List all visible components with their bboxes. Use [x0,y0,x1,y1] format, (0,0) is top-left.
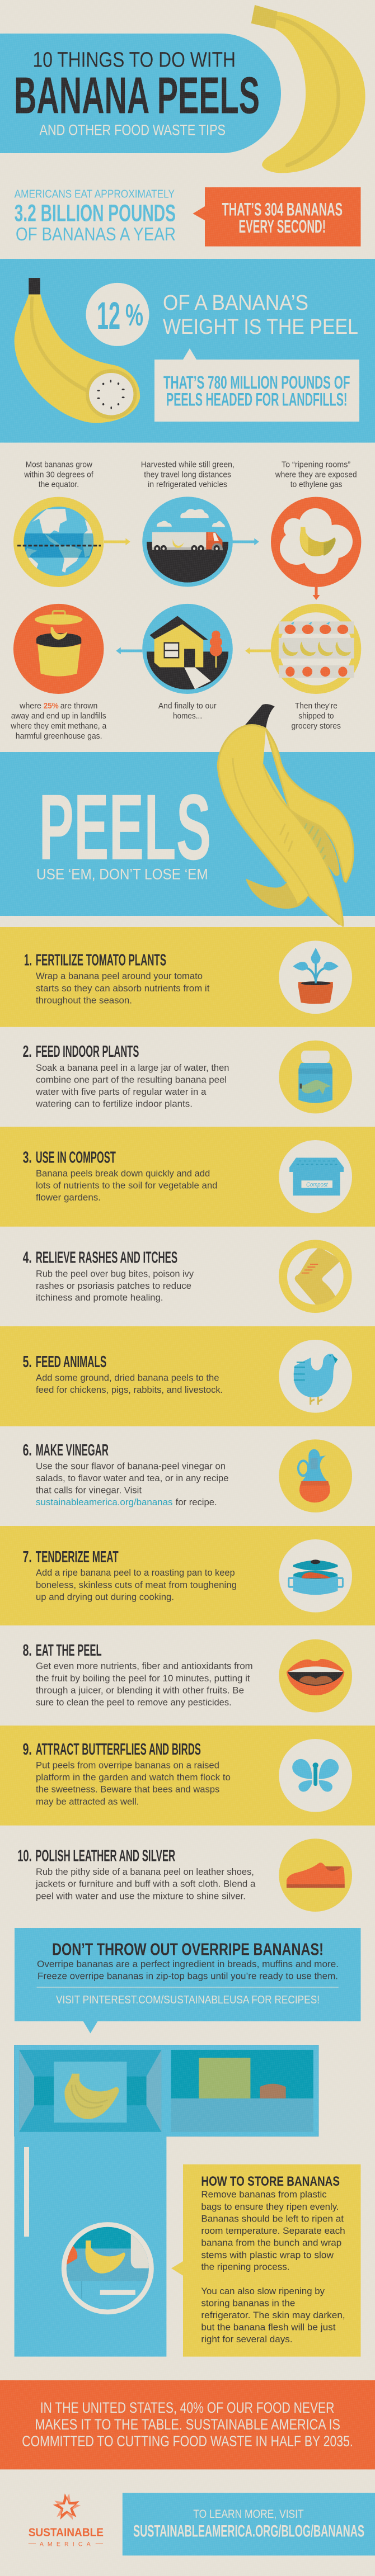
tip 5 [23,1353,223,1395]
illustration: refrigerator [15,2045,318,2357]
tip 9: 9. [23,1741,32,1759]
icon: ripening room cloud [271,497,361,587]
tip 4 [23,1249,194,1303]
step text: harvested green: Harvested while still green, [141,460,235,469]
tip 1: starts so they can absorb nutrients from it [36,984,210,994]
icon: jar with peel [279,1041,352,1113]
tip 5: FEED ANIMALS [36,1353,106,1371]
tip 8: Get even more nutrients, fiber and antioxidants from [36,1661,253,1671]
step text: grocery stores: grocery stores [291,721,341,731]
tip 4: rashes or psoriasis patches to reduce [36,1281,191,1291]
arrow: ripening to grocery [312,587,320,600]
icon: chicken [279,1340,352,1413]
step text: harvested green: they travel long distances [144,470,231,480]
panel: how to store bananas: storing bananas in the [201,2299,295,2309]
icon: trash can with banana [13,604,104,694]
list band: 7 [0,1526,375,1625]
icon: house [142,604,233,694]
step text: harvested green: in refrigerated vehicles [148,480,227,489]
panel: food waste statement [0,2380,375,2469]
tip 3: USE IN COMPOST [36,1148,116,1166]
panel: how to store bananas: Bananas should be left to ripen at [201,2214,344,2224]
tip 7: TENDERIZE MEAT [36,1548,119,1566]
tip 1: throughout the season. [36,995,132,1005]
stat circle: 12 percent: 12 [97,294,120,337]
step text: thrown away: where they emit methane, a [10,721,107,731]
tip 8 [23,1642,253,1708]
tip 10: POLISH LEATHER AND SILVER [35,1847,175,1865]
step text: our homes [158,701,217,721]
heading: weight is the peel [163,291,358,339]
icon: roasting pan [279,1539,352,1613]
tip 1 [24,952,210,1005]
step text: our homes: homes... [173,711,202,721]
tip 6: 6. [23,1441,32,1459]
tip 8: 8. [23,1642,32,1660]
callout: don't throw out overripe bananas: Freeze overripe bananas in zip-top bags until you’re ready to use them. [38,1972,338,1982]
icon: cut banana [15,278,140,423]
tip 9: platform in the garden and watch them flock to [36,1773,231,1783]
tip 3 [23,1148,217,1203]
icon: compost bin: Compost [306,1181,329,1188]
freezer compartment [19,2050,161,2132]
tip 4: itchiness and promote healing. [36,1293,163,1303]
tip 9 [23,1741,231,1807]
callout: 780 million pounds [154,348,359,422]
icon: shoe [279,1838,352,1912]
step text: grow near equator: the equator. [39,480,79,489]
list band: 5 [0,1326,375,1426]
tip 9: ATTRACT BUTTERFLIES AND BIRDS [36,1741,201,1759]
panel: how to store bananas: the ripening process. [201,2262,290,2272]
list band: 9 [0,1726,375,1826]
tip 5: 5. [23,1353,32,1371]
step text: thrown away: where [19,701,41,711]
heading: weight is the peel: OF A BANANA’S [163,291,308,315]
panel: peels heading: USE ‘EM, DON’T LOSE ‘EM [36,866,208,883]
icon: grocery shelves [271,604,361,694]
step text: our homes: And finally to our [158,701,217,711]
panel: how to store bananas: banana from the bunch and wrap [201,2238,341,2248]
step text: thrown away [10,701,107,741]
tip 1: Wrap a banana peel around your tomato [36,971,203,981]
icon: arm with rash [279,1240,352,1313]
tip 8: through a juicer, or blending it with other fruits. Be [36,1686,244,1696]
callout: don't throw out overripe bananas [15,1928,360,2033]
tip 6 [23,1441,228,1507]
title banner: 10 THINGS TO DO WITH [32,48,236,72]
step text: thrown away: are thrown [60,701,97,711]
tip 9: Put peels from overripe bananas on a raised [36,1760,219,1770]
tip 9: may be attracted as well. [36,1797,139,1807]
callout: don't throw out overripe bananas: Overripe bananas are a perfect ingredient in breads, muffins and more. [37,1959,339,1969]
tip 3: Banana peels break down quickly and add [36,1169,210,1179]
panel: how to store bananas: You can also slow ripening by [201,2286,325,2296]
logo: sustainable america: AMERICA [40,2541,91,2548]
arrow: grocery to home [245,647,271,654]
callout: 304 bananas every second [193,187,360,247]
callout: don't throw out overripe bananas: VISIT PINTEREST.COM/SUSTAINABLEUSA FOR RECIPES! [56,1993,320,2006]
icon: vinegar cruet [279,1439,352,1512]
step text: grocery stores: Then they’re [295,701,337,711]
panel: peels heading: PEELS [39,776,211,880]
list band: 3 [0,1127,375,1227]
tip 7 [23,1548,237,1603]
tip 8: sure to clean the peel to remove any pesticides. [36,1698,232,1708]
tip 10: Rub the pithy side of a banana peel on leather shoes, [36,1867,254,1877]
tip 2: water with five parts of regular water in a [35,1087,207,1097]
tip 9: the sweetness. Beware that bees and wasps [36,1785,219,1795]
tip 10: 10. [17,1847,32,1865]
panel: how to store bananas: HOW TO STORE BANANAS [201,2174,340,2189]
panel: peels heading [0,752,375,916]
tip 2: Soak a banana peel in a large jar of water, then [36,1063,229,1073]
step text: grow near equator: Most bananas grow [26,460,92,469]
icon: mouth [279,1639,352,1712]
icon: refrigerated truck [142,497,233,587]
title banner: AND OTHER FOOD WASTE TIPS [39,122,226,139]
icon: butterfly [279,1739,352,1812]
icon: banana peel [218,704,353,927]
tip 7: Add a ripe banana peel to a roasting pan to keep [36,1568,235,1578]
tip 6: MAKE VINEGAR [36,1441,109,1459]
tip 2: 2. [23,1043,32,1061]
tip 6: for recipe. [176,1497,217,1507]
stat: americans eat bananas: OF BANANAS A YEAR [16,224,176,244]
tip 2: watering can to fertilize indoor plants. [35,1099,193,1109]
panel: how to store bananas [171,2164,360,2357]
tip 10 [17,1847,256,1901]
arrow: globe to truck [104,538,130,545]
step text: ripening rooms: To “ripening rooms” [282,460,350,469]
tip 7: boneless, skinless cuts of meat from toughening [36,1580,237,1590]
porthole window [62,2220,154,2314]
tip 1: 1. [24,952,32,970]
stat: americans eat bananas [15,188,176,244]
stat: americans eat bananas: AMERICANS EAT APPROXIMATELY [15,188,175,201]
step text: thrown away: away and end up in landfills [11,711,106,721]
tip 4: RELIEVE RASHES AND ITCHES [36,1249,177,1267]
list band: 1 [0,927,375,1027]
step text: ripening rooms: to ethylene gas [290,480,343,489]
icon: potted plant [279,940,352,1014]
panel: how to store bananas: bags to ensure they ripen evenly. [201,2202,339,2212]
tip 1: FERTILIZE TOMATO PLANTS [36,952,166,970]
panel: how to store bananas: room temperature. Separate each [201,2226,345,2236]
tip 10: peel with water and use the mixture to shine silver. [36,1891,246,1901]
tip 3: lots of nutrients to the soil for vegetable and [36,1180,217,1190]
tip 2: FEED INDOOR PLANTS [36,1043,139,1061]
tip 8: the fruit by boiling the peel for 10 minutes, putting it [36,1674,250,1684]
title banner [0,34,281,153]
tip 5: Add some ground, dried banana peels to the [36,1373,219,1383]
arrow: truck to ripening [232,538,259,545]
stat circle: 12 percent [86,283,149,346]
step text: grow near equator: within 30 degrees of [24,470,93,480]
panel: learn more: TO LEARN MORE, VISIT [193,2507,304,2521]
step text: ripening rooms: where they are exposed [275,470,357,480]
panel: peel weight [0,259,375,443]
tip 4: Rub the peel over bug bites, poison ivy [36,1269,194,1279]
tip 5: feed for chickens, pigs, rabbits, and livestock. [36,1385,223,1395]
panel: learn more [123,2493,375,2555]
door handle [24,2147,29,2237]
panel: how to store bananas: but the banana flesh will be just [201,2323,336,2333]
step text: thrown away: 25% [44,701,59,711]
tip 6: Use the sour flavor of banana-peel vinegar on [36,1461,226,1471]
logo: sustainable america: SUSTAINABLE [29,2526,104,2539]
icon: globe with equator band [13,497,104,587]
tip 7: 7. [23,1548,32,1566]
step text: harvested green [141,460,235,489]
fridge compartment [171,2050,313,2132]
tip 7: up and drying out during cooking. [36,1592,174,1603]
icon: compost bin [279,1140,352,1213]
step text: ripening rooms [275,460,357,489]
panel: how to store bananas: right for several days. [201,2334,293,2345]
tip 2: combine one part of the resulting banana peel [36,1075,227,1085]
logo: sustainable america [29,2491,104,2548]
tip 6: that calls for vinegar. Visit [36,1485,142,1495]
tip 3: 3. [23,1148,32,1166]
tip 4: 4. [23,1249,32,1267]
tip 8: EAT THE PEEL [36,1642,102,1660]
step text: thrown away: harmful greenhouse gas. [16,731,102,741]
step text: grocery stores [291,701,341,731]
panel: how to store bananas: refrigerator. The skin may darken, [201,2310,345,2320]
arrow: home to landfill [116,647,142,654]
step text: grow near equator [24,460,93,489]
tip 3: flower gardens. [36,1193,101,1203]
panel: how to store bananas: Remove bananas from plastic [201,2190,327,2200]
icon: large banana top [251,5,365,173]
tip 10: jackets or furniture and buff with a soft cloth. Blend a [35,1879,256,1889]
panel: how to store bananas: stems with plastic wrap to slow [201,2250,334,2260]
stat: americans eat bananas: 3.2 BILLION POUNDS [15,200,176,226]
tip 6: salads, to flavor water and tea, or in any recipe [36,1473,228,1483]
step text: grocery stores: shipped to [298,711,334,721]
tip 6: sustainableamerica.org/bananas [36,1497,172,1507]
stat circle: 12 percent: % [125,297,143,332]
tip 2 [23,1043,229,1109]
